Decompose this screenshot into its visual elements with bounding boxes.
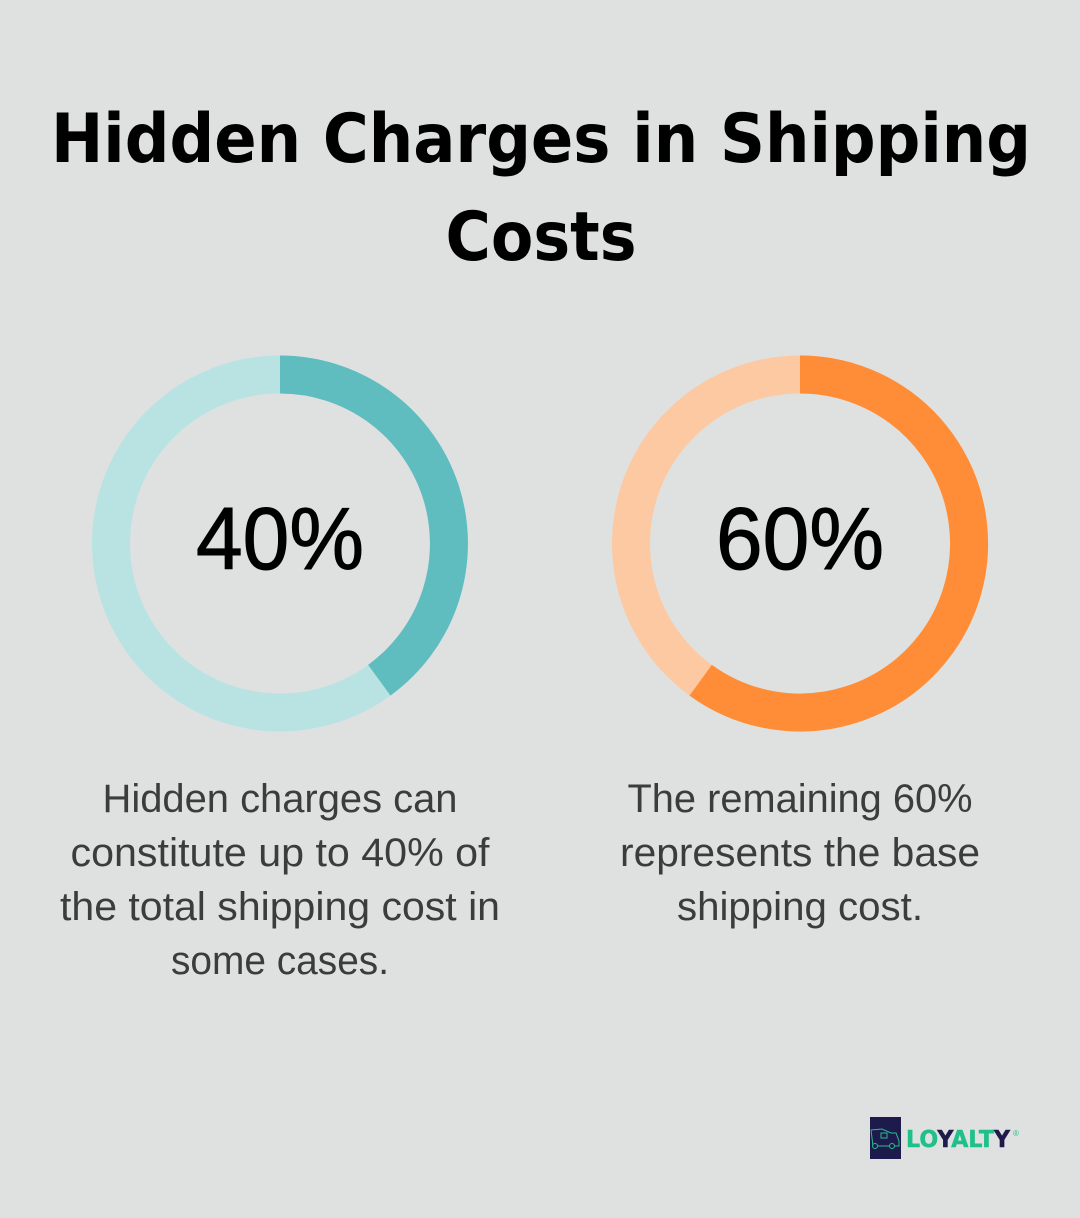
description: hidden charges: Hidden charges can [102,777,458,821]
description: hidden charges: some cases. [171,939,389,983]
description: hidden charges: constitute up to 40% of [70,831,490,875]
panel: 60% base cost [620,374,980,929]
donut chart: 60% [631,374,969,712]
description: base cost [620,777,980,929]
registered mark: ® [1013,1129,1019,1138]
stat: 60%: 60% [716,489,884,588]
donut chart: 40% [111,374,449,712]
description: base cost: represents the base [620,831,980,875]
description: hidden charges [60,777,500,983]
description: base cost: shipping cost. [677,885,923,929]
description: base cost: The remaining 60% [628,777,972,821]
title: Costs [446,198,636,277]
logo: Loyalty [870,1117,1019,1159]
wordmark: LOYALTY [906,1127,1010,1153]
description: hidden charges: the total shipping cost in [60,885,500,929]
title [51,100,1031,277]
stat: 40%: 40% [196,489,364,588]
panel: 40% hidden charges [60,374,500,983]
icon: truck badge [870,1117,901,1159]
